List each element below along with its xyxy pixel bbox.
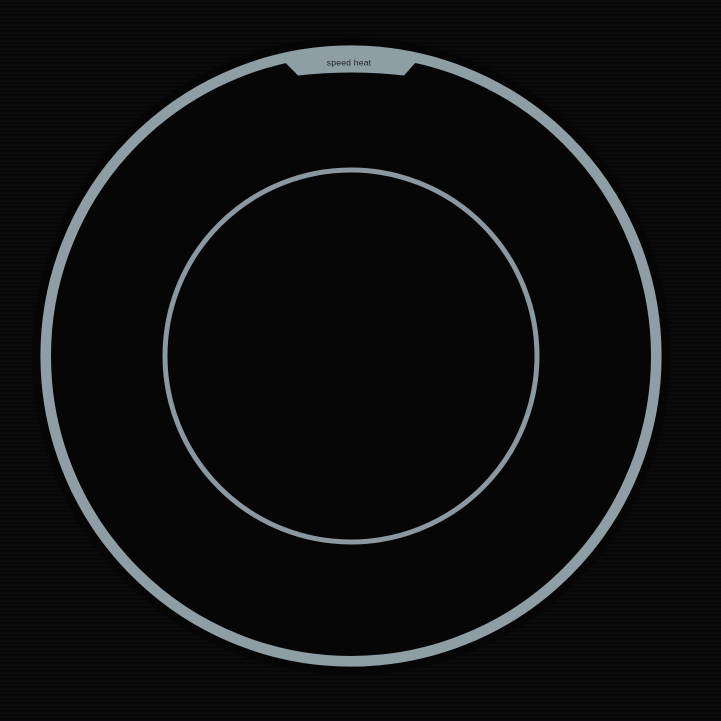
label: speed heat: speed heat [327,58,372,68]
outer ring with speed heat tab [46,50,656,661]
inner ring [165,170,537,542]
tab: speed heat [283,50,419,76]
cooktop zone disc [32,37,670,675]
